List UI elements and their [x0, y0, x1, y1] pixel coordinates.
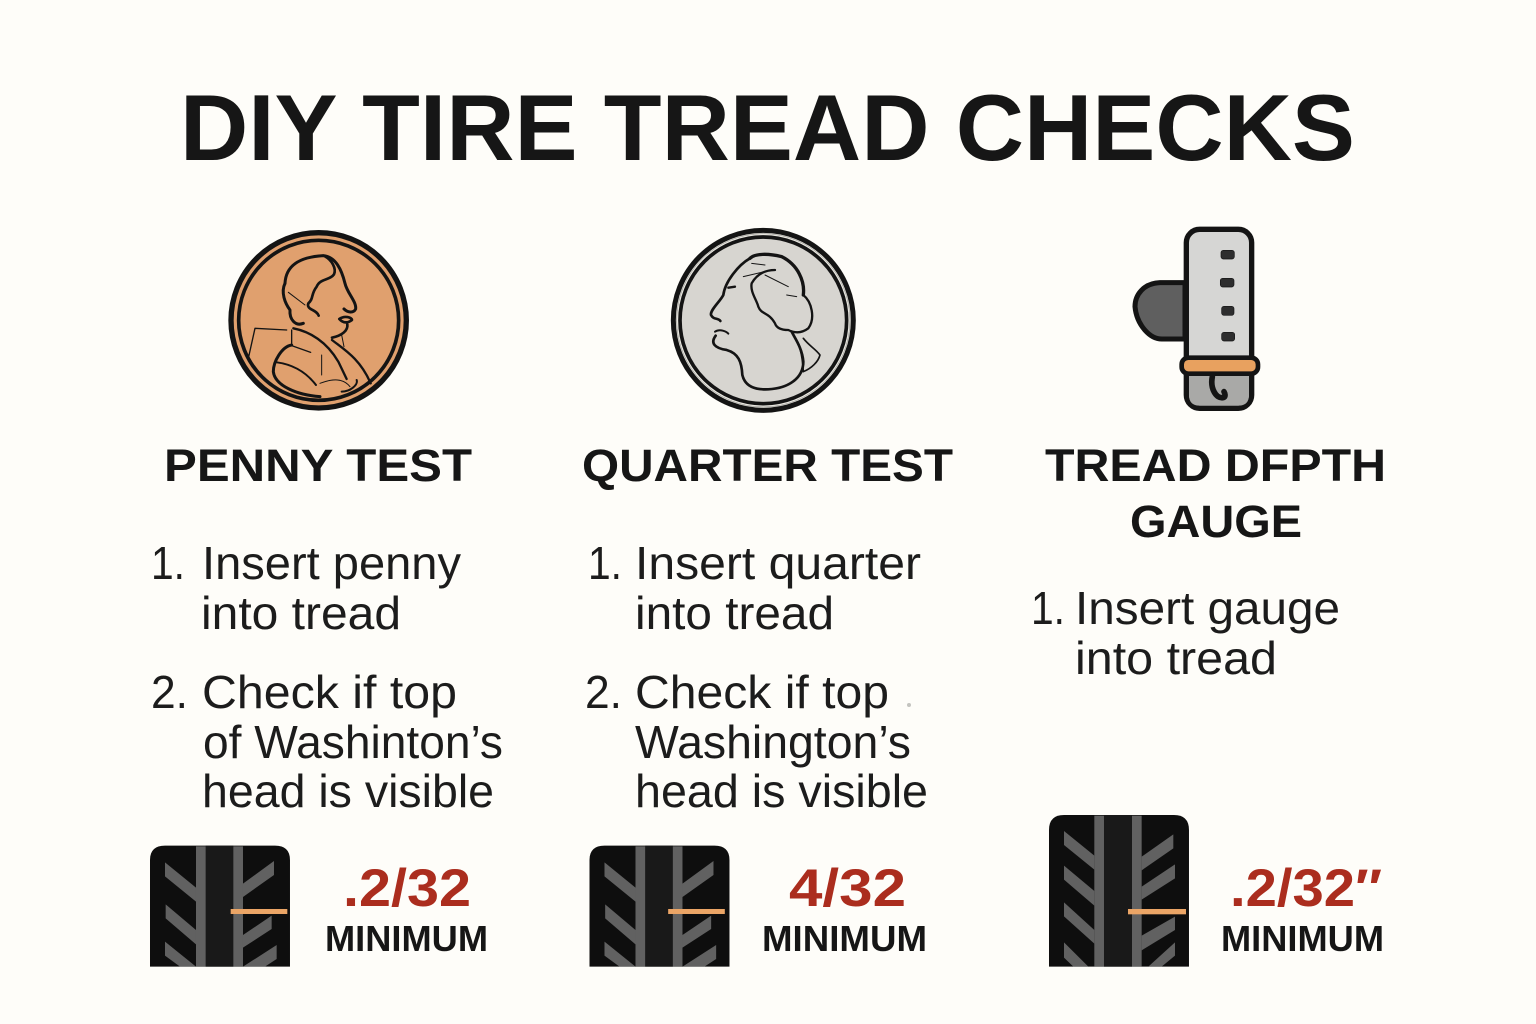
steps: penny test: of Washinton’s: [203, 716, 503, 768]
steps: quarter test: 1.: [588, 537, 622, 589]
steps: penny test: Insert penny: [202, 537, 461, 589]
panel: quarter test: [582, 230, 953, 967]
steps: penny test: head is visible: [202, 765, 494, 817]
heading: penny test: PENNY TEST: [164, 440, 472, 491]
icon: tread depth gauge: [1135, 229, 1258, 408]
steps: penny test: Check if top: [202, 666, 457, 718]
result: 2/32 minimum: MINIMUM: [325, 918, 488, 959]
result: 2/32 inch minimum: MINIMUM: [1221, 918, 1384, 959]
steps: penny test: [151, 537, 503, 817]
heading: tread depth gauge: [1045, 440, 1386, 547]
steps: penny test: into tread: [201, 587, 401, 639]
icon: tire tread with quarter marker: [589, 846, 729, 967]
steps: quarter test: into tread: [635, 587, 834, 639]
result: 4/32 minimum: MINIMUM: [762, 918, 927, 959]
panel: penny test: [150, 233, 503, 967]
steps: penny test: 2.: [151, 666, 188, 718]
icon: tire tread with gauge marker: [1049, 815, 1189, 967]
icon: penny coin: [231, 233, 406, 408]
steps: quarter test: Check if top: [635, 666, 889, 718]
heading: tread depth gauge: GAUGE: [1130, 496, 1302, 547]
result: 4/32 minimum: 4/32: [789, 859, 906, 918]
steps: quarter test: [585, 537, 928, 817]
heading: tread depth gauge: TREAD DFPTH: [1045, 440, 1386, 491]
result: 2/32 inch minimum: .2/32″: [1230, 859, 1382, 918]
result: 2/32 minimum: [325, 859, 488, 959]
result: 2/32 inch minimum: [1221, 859, 1384, 959]
steps: penny test: 1.: [151, 537, 185, 589]
steps: quarter test: Washington’s: [635, 716, 911, 768]
steps: tread depth gauge: [1031, 582, 1340, 684]
heading: quarter test: QUARTER TEST: [582, 440, 953, 491]
steps: tread depth gauge: 1.: [1031, 582, 1065, 634]
icon: tire tread with penny marker: [150, 846, 290, 967]
title: DIY TIRE TREAD CHECKS: [180, 75, 1355, 180]
steps: quarter test: head is visible: [635, 765, 928, 817]
panel: tread depth gauge: [1031, 229, 1386, 967]
steps: tread depth gauge: into tread: [1075, 632, 1277, 684]
result: 2/32 minimum: .2/32: [343, 859, 471, 918]
steps: tread depth gauge: Insert gauge: [1075, 582, 1340, 634]
steps: quarter test: 2.: [585, 666, 622, 718]
icon: quarter coin: [673, 230, 853, 410]
steps: quarter test: Insert quarter: [635, 537, 921, 589]
result: 4/32 minimum: [762, 859, 927, 959]
